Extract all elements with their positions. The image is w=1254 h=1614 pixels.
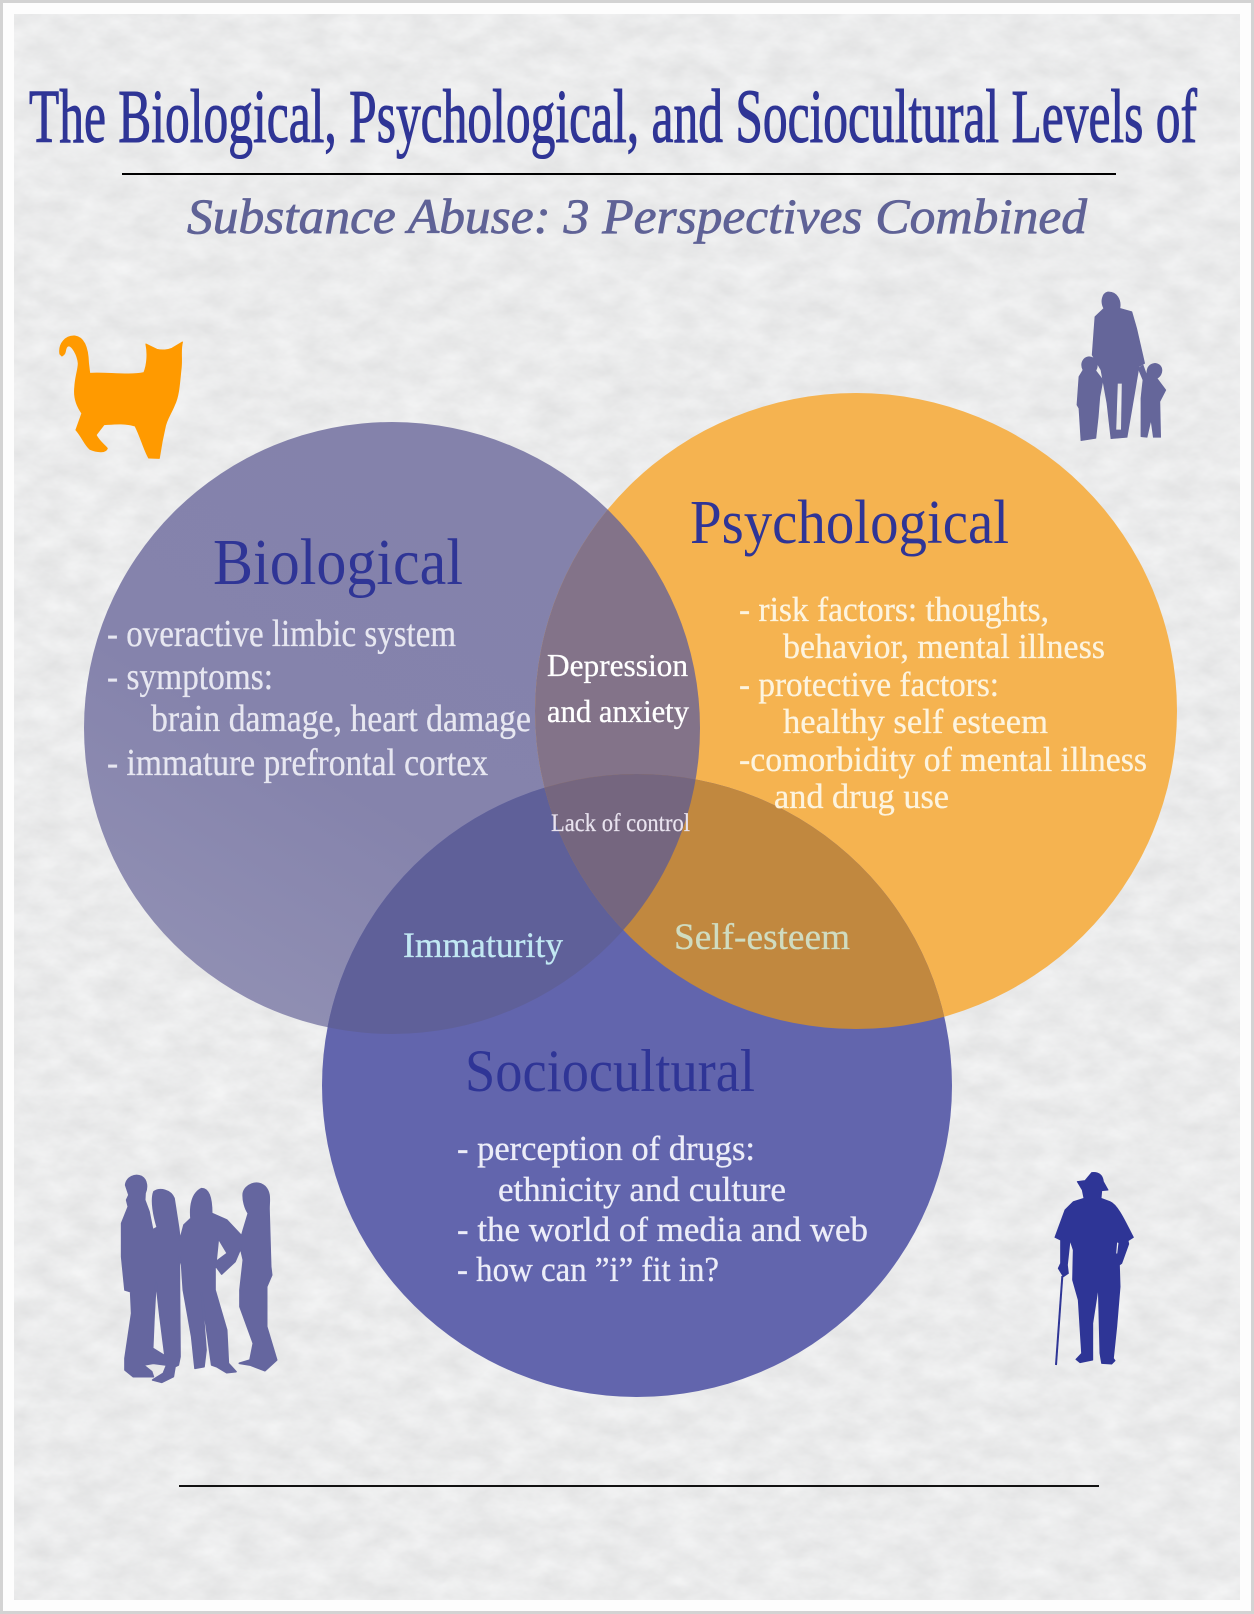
heading: psychological: Psychological bbox=[690, 489, 1009, 557]
list: psychological points: - protective factors: bbox=[739, 665, 999, 704]
list: biological points bbox=[107, 613, 531, 784]
list: sociocultural points: ethnicity and culture bbox=[498, 1170, 786, 1209]
list: biological points: - immature prefrontal cortex bbox=[107, 742, 488, 784]
list: psychological points: healthy self esteem bbox=[783, 702, 1048, 741]
bottom rule bbox=[179, 1485, 1099, 1487]
overlap: psychological and sociocultural bbox=[544, 774, 944, 1029]
list: biological points: - overactive limbic system bbox=[107, 613, 456, 655]
circle: psychological bbox=[535, 393, 1177, 1029]
list: psychological points: and drug use bbox=[774, 777, 949, 816]
list: biological points: brain damage, heart damage bbox=[151, 698, 531, 740]
overlap: all three bbox=[544, 774, 696, 930]
panel text: sociocultural bbox=[457, 1038, 868, 1289]
label: depression and anxiety: and anxiety bbox=[547, 693, 689, 729]
heading: sociocultural: Sociocultural bbox=[465, 1038, 755, 1104]
icon: man with hat and cane silhouette bbox=[1055, 1172, 1133, 1365]
label: lack of control: Lack of control bbox=[551, 810, 690, 837]
overlap: biological and sociocultural bbox=[328, 788, 623, 1034]
icon: group of four people silhouette bbox=[122, 1175, 277, 1382]
icon: orange cat silhouette bbox=[60, 336, 182, 458]
list: biological points: - symptoms: bbox=[107, 656, 273, 698]
circle: biological bbox=[84, 422, 700, 1034]
overlap: biological and psychological bbox=[535, 510, 700, 788]
panel text: biological bbox=[107, 526, 531, 784]
panel text: psychological bbox=[690, 489, 1147, 816]
list: psychological points: -comorbidity of mental illness bbox=[739, 740, 1147, 779]
list: psychological points bbox=[739, 590, 1147, 816]
title rule bbox=[122, 173, 1116, 175]
icon: adult with two children silhouette bbox=[1077, 292, 1166, 441]
list: sociocultural points: - how can ”i” fit in? bbox=[457, 1250, 719, 1289]
label: depression and anxiety bbox=[547, 647, 689, 729]
list: sociocultural points: - the world of media and web bbox=[457, 1210, 868, 1249]
list: sociocultural points: - perception of drugs: bbox=[457, 1129, 755, 1168]
label: depression and anxiety: Depression bbox=[547, 647, 688, 683]
list: psychological points: - risk factors: thoughts, bbox=[739, 590, 1049, 629]
label: immaturity: Immaturity bbox=[403, 925, 563, 965]
list: sociocultural points bbox=[457, 1129, 868, 1289]
heading: biological: Biological bbox=[213, 526, 463, 599]
venn diagram bbox=[84, 393, 1177, 1397]
circle: sociocultural bbox=[322, 774, 952, 1397]
label: self-esteem: Self-esteem bbox=[674, 917, 850, 958]
subtitle: Substance Abuse: 3 Perspectives Combined bbox=[187, 188, 1088, 244]
list: psychological points: behavior, mental illness bbox=[783, 627, 1105, 666]
